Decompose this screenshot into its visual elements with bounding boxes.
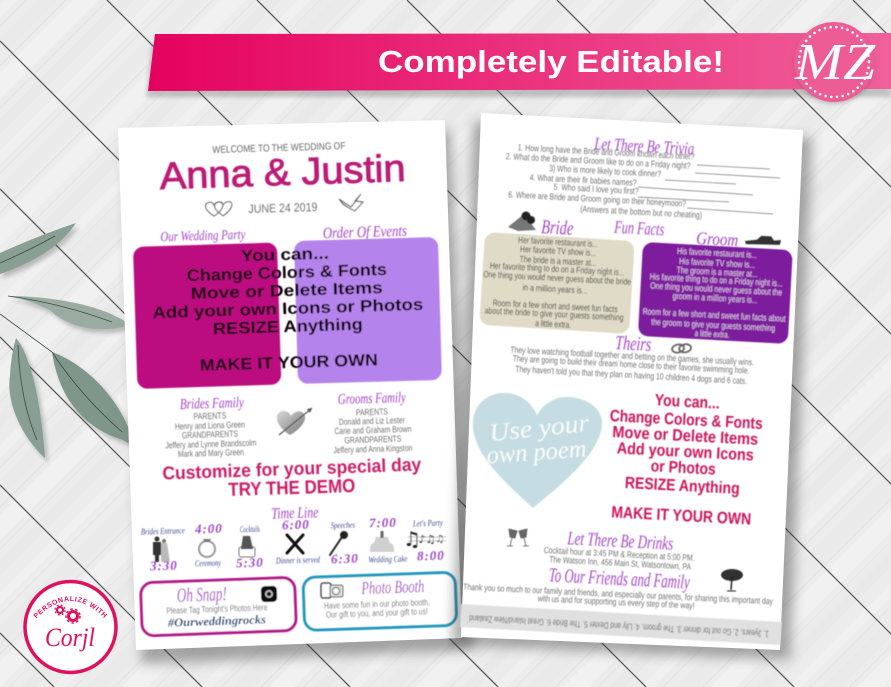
panel: bride facts: about the bride to give your guests something: [484, 305, 624, 323]
text block: you can list: [152, 245, 424, 375]
panel: groom facts: a little extra.: [694, 328, 730, 340]
text block: grooms family: Grooms Family: [338, 390, 406, 408]
text: customize call to action: Customize for your special day: [162, 453, 422, 484]
heading: our wedding party: Our Wedding Party: [160, 228, 246, 245]
heading: let there be drinks: Let There Be Drinks: [566, 528, 674, 555]
panel: groom facts: the groom to give your guests something: [651, 317, 775, 333]
heading: to our friends and family: To Our Friends and Family: [548, 564, 690, 594]
text block: you can list pink: MAKE IT YOUR OWN: [611, 503, 752, 529]
text block: grooms family: Jeffery and Anna Kingston: [333, 443, 413, 455]
heading: theirs: Theirs: [615, 332, 652, 356]
text block: trivia questions: [506, 142, 780, 220]
panel: photo booth box: Our gift to you, and your gift to us!: [326, 606, 428, 620]
text block: you can list: RESIZE Anything: [213, 316, 363, 338]
text block: brides family: Mark and Mary Green: [178, 447, 244, 459]
logo: MZ badge: [794, 22, 876, 104]
heading: groom: Groom: [696, 228, 739, 250]
text block: cocktail details: The Watson Inn, 456 Main St, Watsontown, PA: [549, 554, 691, 572]
panel: oh snap hashtag box: #Ourweddingrocks: [167, 612, 266, 630]
text: welcome line: WELCOME TO THE WEDDING OF: [212, 141, 346, 156]
text block: you can list pink: RESIZE Anything: [624, 474, 740, 498]
panel: photo booth box: Have some fun in our photo booth,: [324, 597, 430, 611]
text block: grooms family: Donald and Liz Lester: [339, 415, 405, 427]
icon: music notes: [403, 527, 446, 551]
icon: music notes: ♪♫: [419, 533, 435, 546]
chart: wedding day timeline: Dinner is served: [275, 554, 320, 566]
chart: wedding day timeline: Brides Entrance: [141, 525, 185, 537]
panel: photo booth box: Photo Booth: [360, 576, 425, 598]
chart: wedding day timeline: 8:00: [417, 548, 445, 563]
panel: bride facts: One thing you would never guess about the bride: [483, 269, 631, 287]
icon: heart with arrow: [277, 408, 312, 435]
text block: you can list: Change Colors & Fonts: [187, 261, 387, 285]
panel: bride facts: The bride is a master at...: [519, 254, 597, 268]
text block: grooms family: Carie and Graham Brown: [334, 424, 412, 436]
text block: trivia questions: 5. Who said I love you first?: [553, 182, 639, 196]
text block: theirs facts: They haven't told you that they plan on having 10 children 4 dogs and 6 cats.: [515, 364, 747, 386]
banner: completely editable: [146, 33, 891, 97]
text block: cocktail details: [543, 545, 695, 572]
panel: bride facts: in a million years is...: [522, 282, 588, 296]
logo: MZ badge: MZ: [794, 34, 876, 91]
text block: theirs facts: [510, 345, 754, 386]
text block: brides family: PARENTS: [193, 411, 227, 421]
text block: you can list: You can...: [241, 245, 329, 265]
text: try the demo: TRY THE DEMO: [228, 476, 356, 501]
panel: right program page: [452, 113, 812, 660]
icon: dove: [339, 194, 363, 211]
panel: left program page: [118, 120, 474, 664]
icon: ring: [199, 539, 215, 557]
text block: you can list pink: Move or Delete Items: [612, 423, 759, 449]
panel: oh snap hashtag box: [140, 577, 296, 636]
illustration: poem heart: own poem: [486, 436, 587, 469]
illustration: poem heart: Use your: [488, 410, 591, 447]
text block: trivia questions: 6. Where are Bride and Groom going on their honeymoon?: [508, 189, 686, 209]
panel: bride facts: Her favorite restaurant is...: [518, 235, 598, 249]
text block: you can list: Move or Delete Items: [191, 279, 383, 303]
text block: thank you: Thank you so much to our family and friends, and especially our parents, for sharing this important day: [463, 582, 774, 606]
chart: wedding day timeline: 5:30: [236, 555, 264, 570]
panel: bride facts: Her favorite TV show is...: [520, 244, 596, 258]
text block: brides family: Jeffery and Lynne Brandscolm: [165, 438, 257, 450]
chart: wedding day timeline: [141, 515, 446, 573]
panel: groom facts: One thing you would never guess about the: [650, 281, 782, 297]
text block: trivia questions: 4. What are their fir babies names?: [529, 172, 637, 188]
chart: wedding day timeline: Cocktails: [240, 524, 260, 534]
icon: fork and knife: [287, 535, 303, 553]
text block: brides family: Henry and Liona Green: [175, 419, 245, 432]
icon: music notes: ♫: [436, 534, 444, 545]
text block: grooms family: [333, 390, 413, 455]
panel: groom facts: Room for a few short and sweet fun facts about: [642, 306, 786, 324]
text block: you can list: Add your own Icons or Photos: [152, 296, 424, 322]
text block: brides family: [165, 395, 257, 459]
heading: time line: Time Line: [271, 504, 319, 523]
icon: linked hearts: [205, 202, 232, 216]
text block: trivia questions: (Answers at the bottom but no cheating): [580, 204, 702, 220]
heading: order of events: Order Of Events: [323, 223, 407, 242]
panel: lavender order of events box: [294, 237, 442, 384]
panel: magenta wedding party box: [133, 242, 281, 389]
icon: vintage car: [745, 235, 781, 246]
panel: photo booth box: [303, 572, 457, 630]
panel: groom facts: His favorite restaurant is...: [677, 246, 757, 260]
panel: oh snap hashtag box: Please Tag Tonight's Photos Here: [166, 602, 268, 616]
icon: wedding rings: [671, 342, 692, 354]
icon: cocktail: [239, 536, 255, 557]
text block: trivia questions: 2. What do the Bride and Groom like to do on a Friday night?: [506, 151, 691, 171]
text block: trivia questions: 1. How long have the Bride and Groom known each other?: [518, 142, 695, 162]
illustration: poem heart: [473, 393, 602, 508]
text block: thank you: with us and for supporting us every step of the way!: [537, 593, 695, 611]
banner title: Completely Editable!: [378, 44, 724, 79]
panel: upside down answers band: 1. 3years. 2. Go out for dinner 3. The groom. 4. Lily and Dexter 5. The Bride 6. Great Island/New Zealand: [469, 613, 769, 639]
badge: personalize with Corjl: [23, 580, 118, 674]
chart: wedding day timeline: 4:00: [194, 521, 223, 536]
icon: wedding cake: [370, 531, 394, 552]
chart: wedding day timeline: 3:30: [149, 558, 178, 573]
leaf branch decoration: [0, 223, 149, 462]
icon: tree: [721, 569, 743, 591]
title: couple names: Anna & Justin: [159, 148, 406, 198]
chart: wedding day timeline: Speeches: [331, 520, 355, 530]
panel: groom facts: The groom is a master at...: [676, 265, 758, 279]
icon: instagram camera: [261, 586, 277, 602]
chart: wedding day timeline: 7:00: [369, 515, 397, 530]
icon: music notes: ♫: [403, 527, 421, 551]
panel: groom facts: [638, 242, 793, 344]
panel: groom facts: His favorite TV show is...: [679, 256, 755, 270]
heading: trivia: Let There Be Trivia: [593, 133, 695, 159]
icon: microphone: [330, 532, 348, 555]
text block: you can list pink: Add your own Icons: [616, 439, 754, 465]
heading: fun facts: Fun Facts: [613, 217, 665, 239]
chart: wedding day timeline: Let's Party: [412, 518, 443, 528]
text block: theirs facts: They love watching football together and betting on the games, she usually wins.: [510, 345, 754, 367]
text block: you can list: MAKE IT YOUR OWN: [200, 351, 378, 375]
text block: you can list pink: You can...: [654, 391, 720, 413]
icon: phone and camera: [321, 583, 343, 598]
text block: theirs facts: They are going to build their dream home close to their favorite swimming hole.: [513, 353, 750, 376]
heading: bride: Bride: [541, 216, 574, 240]
badge: personalize with Corjl: PERSONALIZE WITH: [33, 596, 108, 618]
panel: bride facts: Her favorite thing to do on a Friday night is...: [489, 260, 625, 278]
chart: wedding day timeline: 6:30: [331, 551, 359, 566]
text block: grooms family: PARENTS: [356, 407, 388, 417]
text block: grooms family: GRANDPARENTS: [344, 434, 402, 445]
panel: bride facts: a little extra.: [535, 318, 571, 330]
panel: oh snap hashtag box: Oh Snap!: [176, 583, 227, 607]
panel: groom facts: groom in a million years is...: [672, 291, 758, 305]
text block: you can list pink: Change Colors & Fonts: [609, 407, 763, 433]
text block: cocktail details: Cocktail hour at 3:45 PM & Reception at 5:00 PM.: [543, 545, 695, 563]
icon: bride silhouette: [508, 212, 536, 231]
chart: wedding day timeline: 6:00: [282, 517, 310, 532]
panel: upside down answers band: [460, 604, 782, 645]
text block: brides family: Brides Family: [180, 395, 244, 413]
panel: bride facts: [479, 232, 635, 334]
icon: champagne glasses: [507, 529, 529, 546]
panel: groom facts: His favorite thing to do on a Friday night is...: [649, 272, 783, 288]
badge: personalize with Corjl: Corjl: [45, 623, 95, 652]
text block: you can list pink: [609, 391, 763, 529]
chart: wedding day timeline: Ceremony: [195, 558, 221, 568]
icon: bride and groom: [153, 536, 170, 562]
text block: trivia questions: 3) Who is more likely to cook dinner?: [549, 163, 661, 179]
text: date: JUNE 24 2019: [248, 200, 318, 216]
text block: brides family: GRANDPARENTS: [182, 429, 238, 440]
panel: bride facts: Room for a few short and sweet fun facts: [492, 298, 618, 314]
text block: you can list pink: or Photos: [650, 457, 716, 479]
chart: wedding day timeline: Wedding Cake: [368, 553, 408, 565]
